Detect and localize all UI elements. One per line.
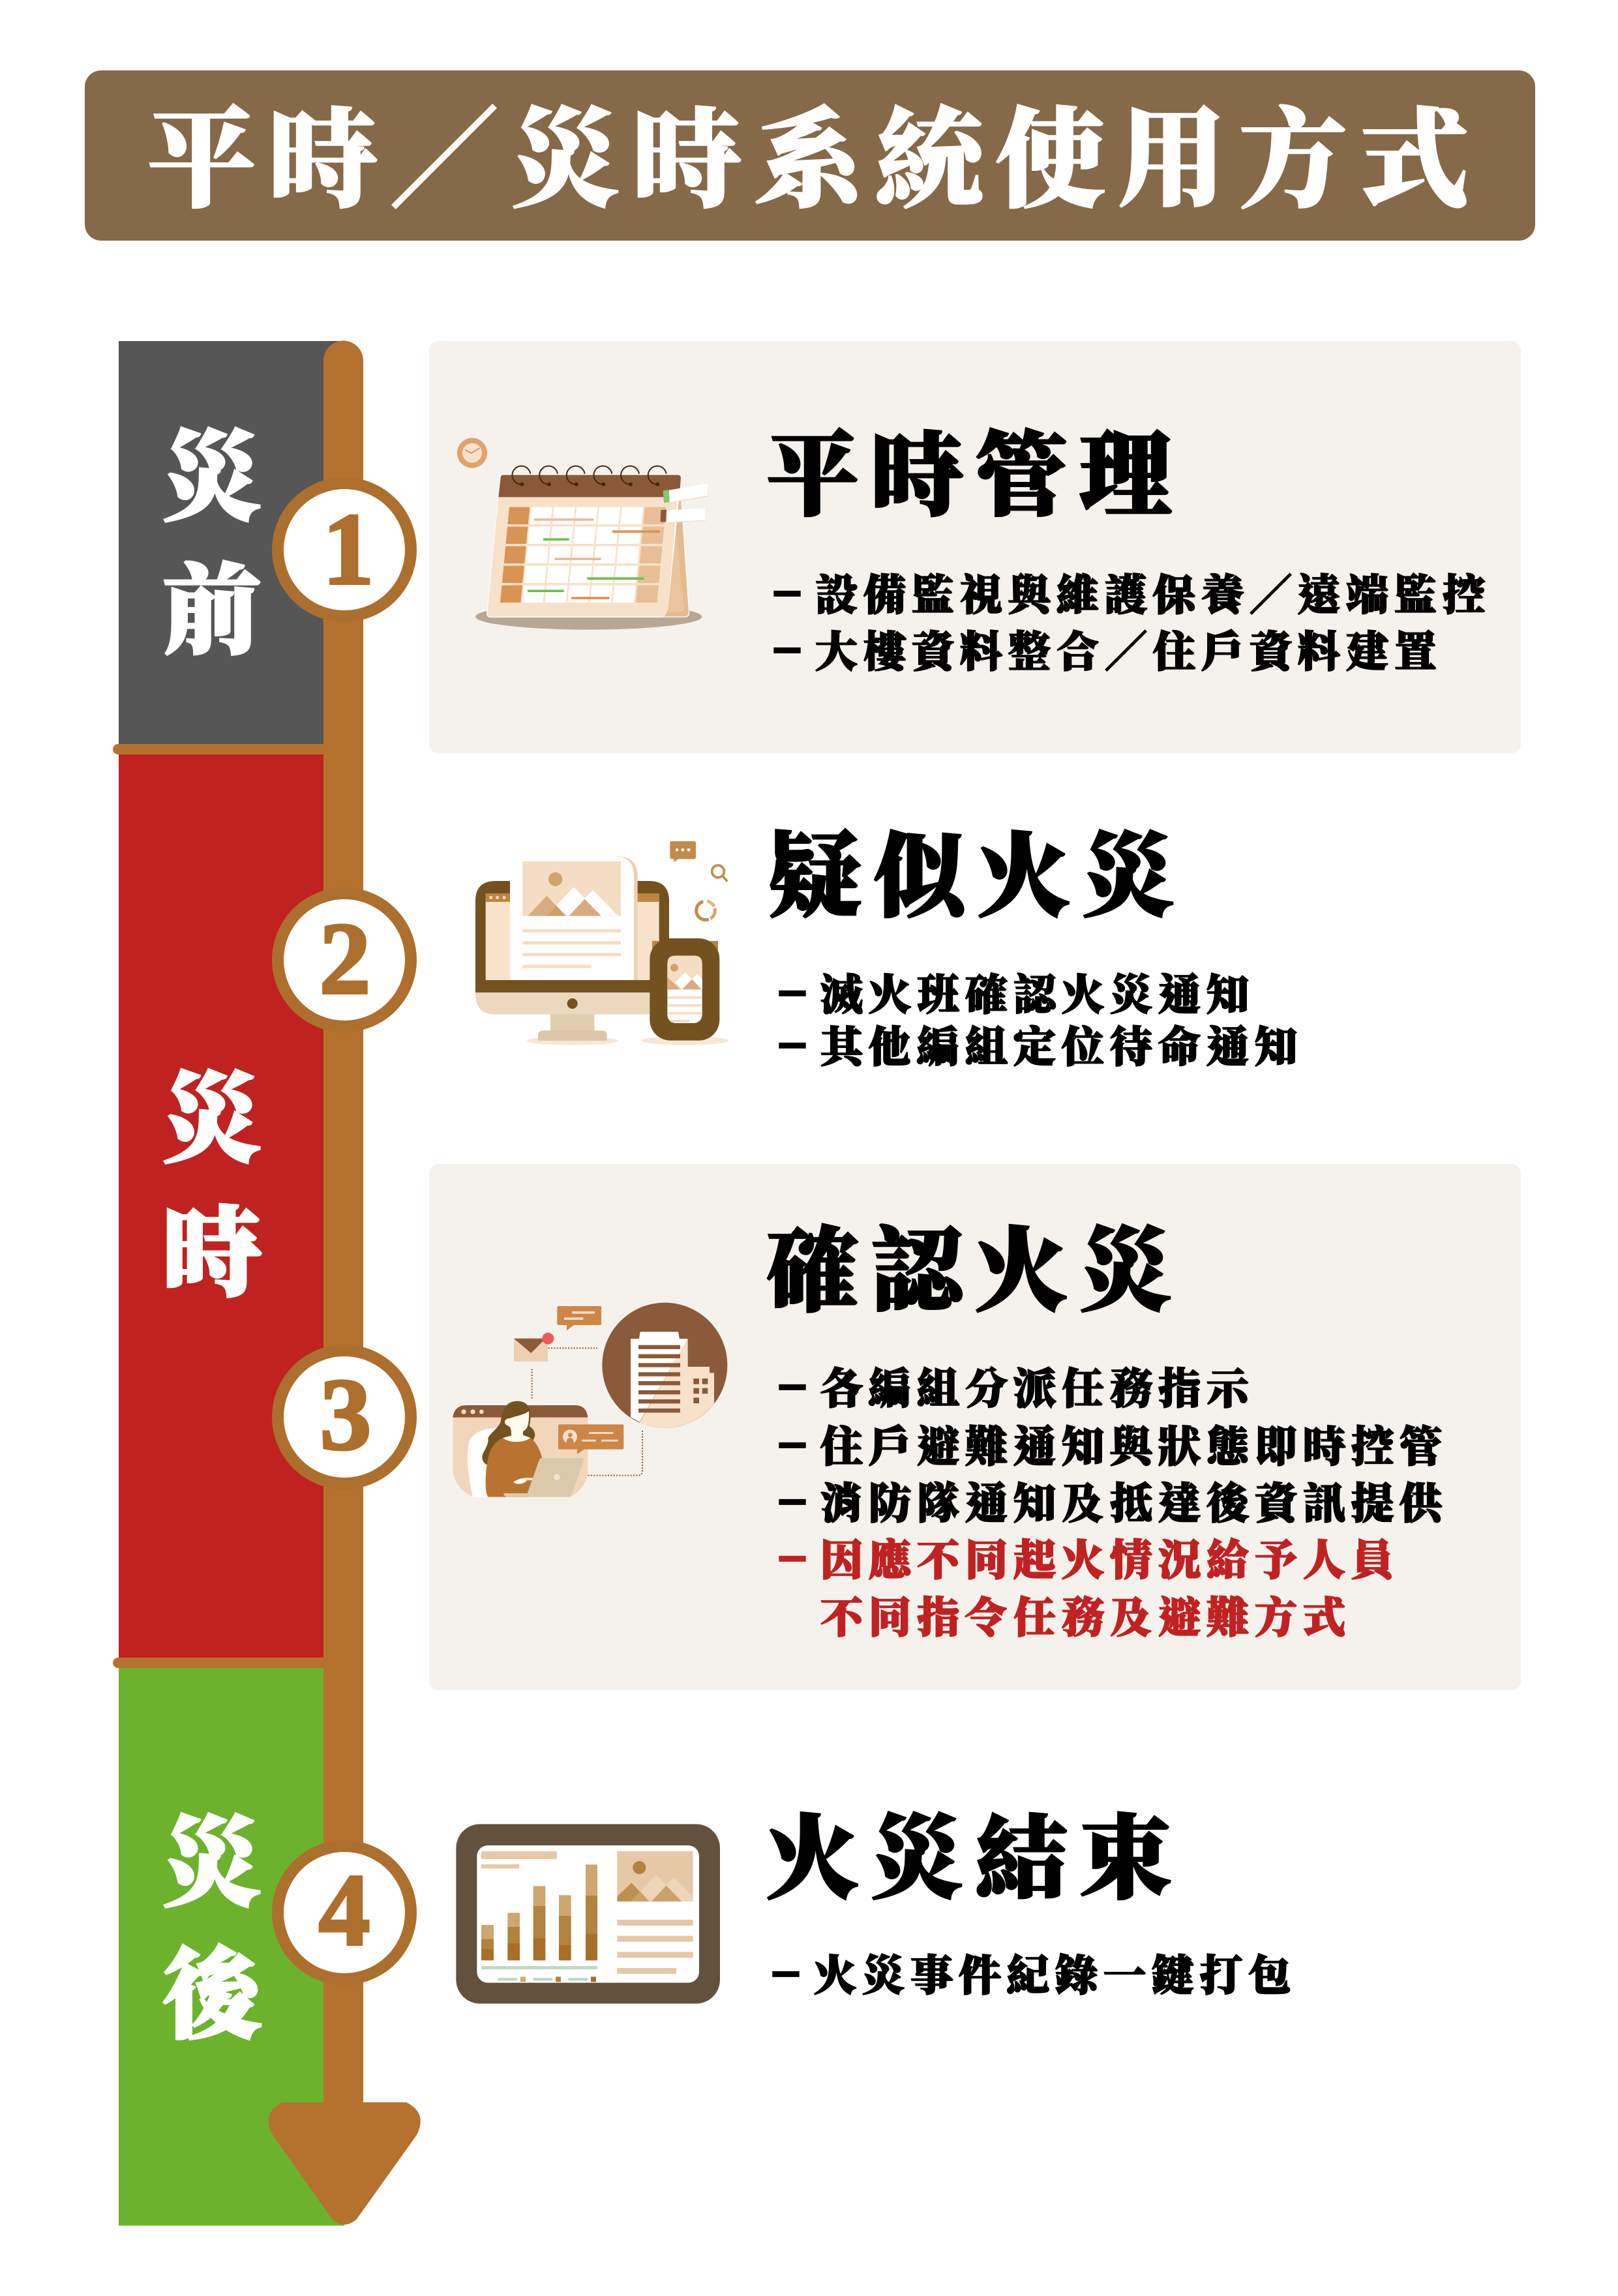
phase block: after disaster <box>119 1662 344 2226</box>
list: confirmed fire items: － <box>774 1360 811 1412</box>
heading: confirmed fire: 確認火災 <box>767 1222 1184 1323</box>
list: confirmed fire items: － <box>774 1531 811 1584</box>
icon: tablet report <box>456 1824 720 2004</box>
heading: fire ended: 火災結束 <box>767 1810 1184 1911</box>
section: fire ended <box>456 1810 1296 2004</box>
list: confirmed fire items: 住戶避難通知與狀態即時控管 <box>820 1424 1448 1471</box>
list: suspected fire items: 滅火班確認火災通知 <box>820 972 1255 1019</box>
step badge 1: 1 <box>322 492 374 606</box>
phase block: during disaster: 時 <box>163 1200 261 1309</box>
phase block: before disaster: 前 <box>163 558 261 666</box>
list: routine management items: － <box>769 623 805 676</box>
list: confirmed fire items: 不同指令任務及避難方式 <box>820 1595 1351 1642</box>
step badge 4 <box>272 1840 417 1985</box>
list: fire ended items: 火災事件紀錄一鍵打包 <box>814 1953 1296 2000</box>
panel: confirmed fire <box>429 1164 1521 1690</box>
list: confirmed fire items: 消防隊通知及抵達後資訊提供 <box>820 1481 1448 1528</box>
list: confirmed fire items: － <box>774 1418 811 1470</box>
section: suspected fire <box>475 827 1303 1071</box>
phase block: before disaster: 災 <box>163 425 263 533</box>
list: confirmed fire items: － <box>774 1474 811 1527</box>
step badge 3 <box>272 1345 417 1489</box>
list: suspected fire items: － <box>774 1018 811 1071</box>
title banner <box>85 70 1535 241</box>
list: routine management items: － <box>769 566 805 619</box>
icon: monitor and phone <box>475 841 728 1045</box>
panel: routine management <box>429 341 1521 753</box>
list: routine management items: 設備監視與維護保養／遠端監控 <box>815 573 1491 619</box>
step badge 1 <box>272 477 417 622</box>
icon: calendar <box>457 438 709 630</box>
icon: building and operator <box>453 1303 727 1497</box>
list: suspected fire items: － <box>774 966 811 1019</box>
phase block: after disaster: 災 <box>163 1811 263 1919</box>
list: confirmed fire items: 各編組分派任務指示 <box>820 1366 1255 1413</box>
list: confirmed fire items <box>774 1360 1448 1642</box>
phase block: during disaster <box>119 749 340 1662</box>
step badge 3: 3 <box>320 1358 372 1472</box>
phase block: after disaster: 後 <box>163 1943 267 2051</box>
step badge 4: 4 <box>318 1853 370 1967</box>
heading: routine management: 平時管理 <box>767 426 1184 528</box>
list: routine management items: 大樓資料整合／住戶資料建置 <box>815 629 1443 676</box>
arrow: timeline <box>113 340 421 2225</box>
title text: 平時／災時系統使用方式 <box>147 101 1482 221</box>
phase block: before disaster <box>119 341 340 749</box>
list: routine management items <box>769 566 1491 676</box>
list: fire ended items: － <box>768 1946 804 1999</box>
phase block: during disaster: 災 <box>163 1067 263 1175</box>
list: suspected fire items: 其他編組定位待命通知 <box>820 1024 1303 1071</box>
list: suspected fire items <box>774 966 1303 1071</box>
step badge 2 <box>272 887 417 1032</box>
step badge 2: 2 <box>320 902 370 1016</box>
heading: suspected fire: 疑似火災 <box>770 827 1187 929</box>
list: confirmed fire items: 因應不同起火情況給予人員 <box>820 1537 1400 1585</box>
timeline: phases and arrow <box>113 340 421 2226</box>
